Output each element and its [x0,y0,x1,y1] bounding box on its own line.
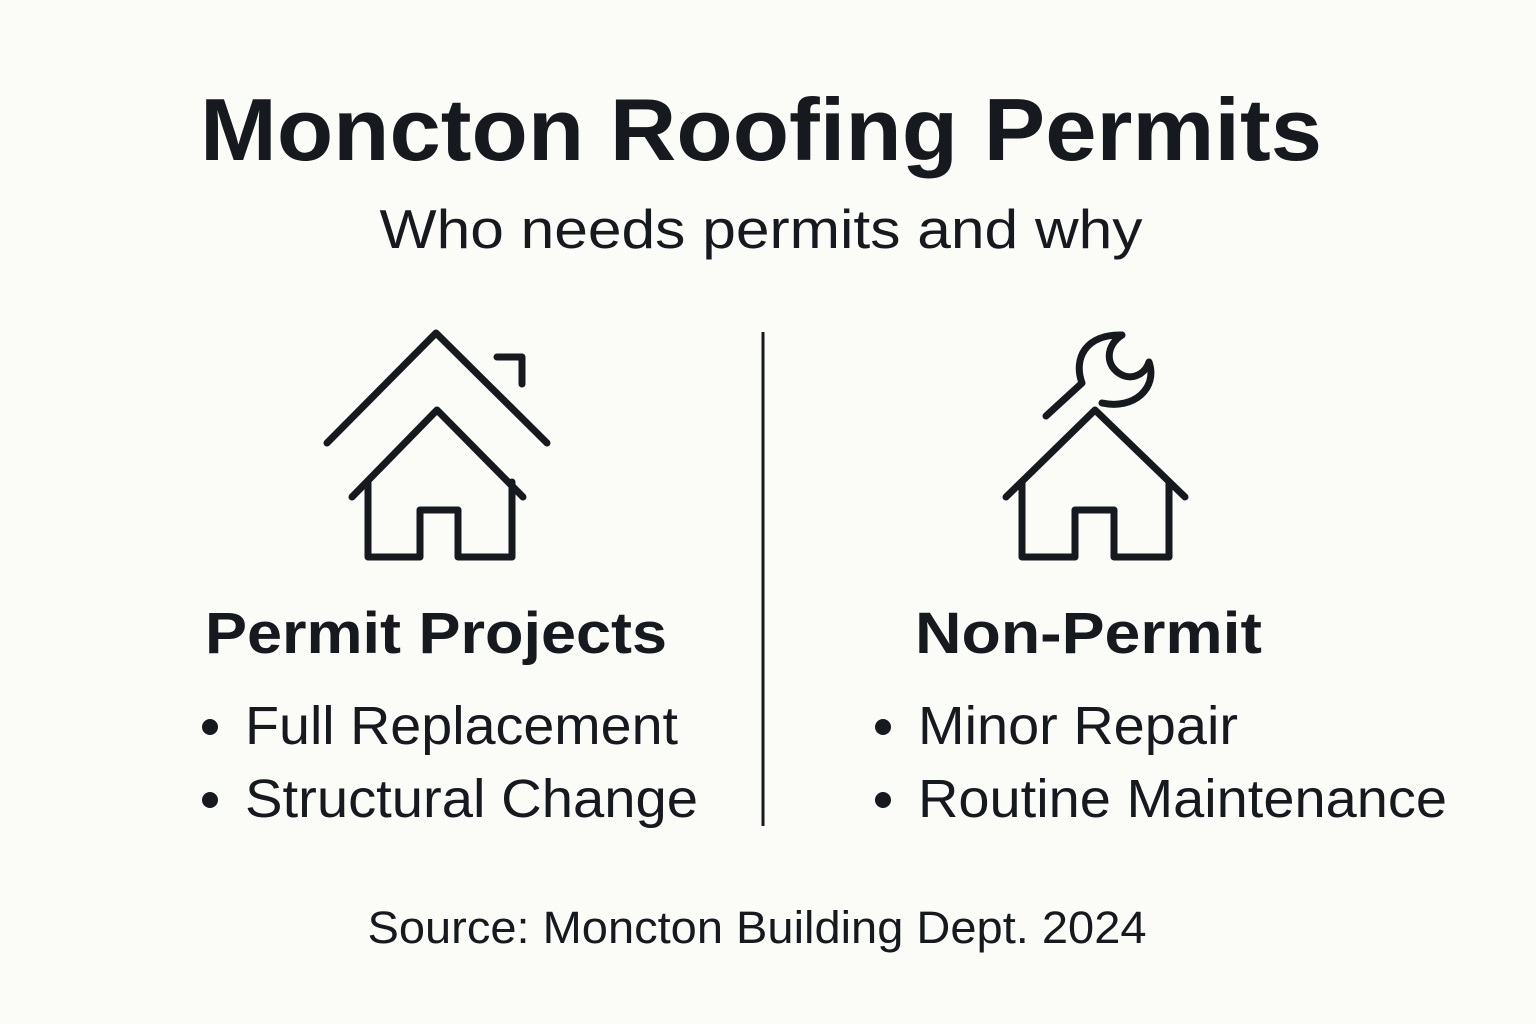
list: non-permit: Minor Repair [918,696,1238,756]
heading: Permit Projects: Permit Projects [205,601,667,666]
subtitle: Who needs permits and why [380,198,1143,260]
list: permit: Full Replacement [245,696,678,756]
title: Moncton Roofing Permits [200,80,1322,179]
divider [762,332,764,826]
icon: house with wrench [1006,335,1185,557]
source: Source: Moncton Building Dept. 2024 [368,902,1146,953]
heading: Non-Permit: Non-Permit [915,601,1262,666]
list: permit: Structural Change [245,769,698,829]
icon: house with roof [327,333,547,557]
list: non-permit: Routine Maintenance [918,769,1447,829]
list: non-permit [875,696,1447,829]
list: permit [202,696,698,829]
